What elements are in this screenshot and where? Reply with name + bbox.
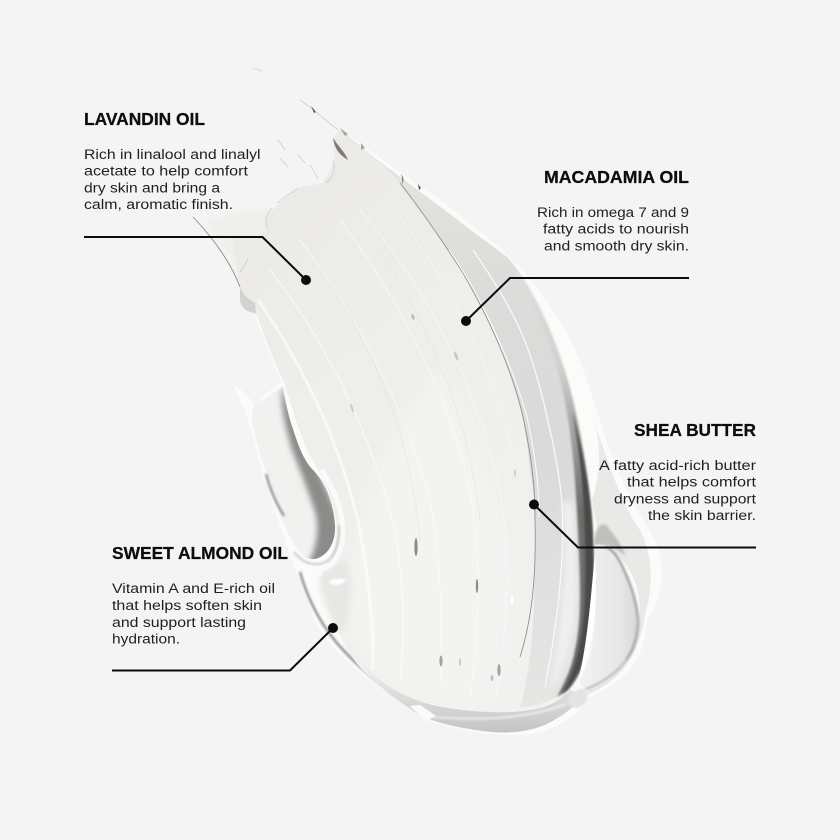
text: lavandin oil description: acetate to help comfort — [84, 164, 248, 180]
heading: sweet almond oil: SWEET ALMOND OIL — [112, 543, 288, 563]
bubbles — [349, 314, 516, 681]
text: lavandin oil description — [84, 147, 260, 213]
gloss highlight — [328, 579, 346, 585]
text: shea butter description: the skin barrier. — [648, 508, 756, 524]
speck — [401, 174, 403, 184]
pocket dark crescent — [282, 386, 340, 566]
text: sweet almond oil description: and support lasting — [112, 615, 246, 631]
text: macadamia oil description: fatty acids to nourish — [543, 222, 689, 238]
left pocket — [252, 386, 343, 569]
top wisps — [193, 68, 338, 287]
right lobe — [578, 420, 651, 696]
left blob — [240, 287, 256, 313]
text: shea butter description: A fatty acid-rich butter — [599, 458, 756, 474]
fold band — [355, 653, 582, 732]
lower-left shadow edge — [300, 572, 425, 716]
fold highlight — [594, 524, 626, 556]
ridge nick 2 — [361, 143, 365, 150]
fold highlight line — [424, 704, 566, 719]
lobe lower edge — [586, 660, 626, 689]
white slit — [578, 552, 596, 682]
text: macadamia oil description: and smooth dry skin. — [544, 238, 689, 254]
callout: lavandin oil — [84, 109, 311, 285]
text: sweet almond oil description: Vitamin A and E-rich oil — [112, 581, 275, 597]
lobe inner — [580, 546, 637, 688]
lobe dark edge — [606, 547, 638, 660]
bottom right connector — [567, 688, 588, 708]
leader line: macadamia oil — [461, 278, 689, 326]
pale gloss beside dark shadow — [550, 500, 577, 690]
shadow beside band — [507, 257, 594, 697]
text: lavandin oil description: Rich in linalool and linalyl — [84, 147, 260, 163]
text: shea butter description: dryness and support — [614, 492, 756, 508]
lower-left gloss — [318, 560, 350, 636]
text: sweet almond oil description: that helps soften skin — [112, 598, 262, 614]
callout: macadamia oil — [461, 167, 689, 326]
brush streaks — [258, 183, 563, 700]
text: sweet almond oil description: hydration. — [112, 632, 180, 648]
heading: macadamia oil: MACADAMIA OIL — [544, 167, 689, 187]
main cream body — [234, 128, 594, 713]
leader line: sweet almond oil — [112, 623, 338, 670]
heading: lavandin oil: LAVANDIN OIL — [84, 109, 205, 129]
notch — [410, 705, 436, 721]
flap dark edge — [266, 474, 284, 516]
top ridge shadows — [240, 106, 421, 313]
grey band — [372, 155, 587, 708]
pocket rim shadow — [294, 525, 339, 564]
leader line: shea butter — [529, 500, 756, 548]
callout: sweet almond oil — [112, 543, 338, 670]
cream smear — [193, 68, 662, 735]
text: macadamia oil description: Rich in omega 7 and 9 — [537, 205, 689, 221]
text: shea butter description — [599, 458, 756, 524]
text: macadamia oil description — [537, 205, 689, 254]
ridge shadow — [333, 138, 348, 160]
ridge nick — [340, 128, 348, 136]
heading: shea butter: SHEA BUTTER — [634, 420, 756, 440]
text: lavandin oil description: dry skin and bring a — [84, 180, 220, 196]
bottom folds — [355, 653, 588, 732]
speck — [418, 184, 421, 190]
lighter lower body — [350, 370, 510, 708]
text: lavandin oil description: calm, aromatic finish. — [84, 197, 233, 213]
outer white rim of smear — [233, 128, 662, 735]
callout: shea butter — [529, 420, 756, 548]
dark shadow core — [562, 410, 594, 695]
feathered top-left edge — [205, 210, 270, 290]
leader line: lavandin oil — [84, 237, 311, 285]
ridge tip — [311, 106, 316, 113]
text: shea butter description: that helps comfort — [627, 474, 756, 490]
pocket rim — [290, 470, 343, 569]
text: sweet almond oil description — [112, 581, 275, 648]
pocket inner — [252, 386, 335, 559]
lobe pale outer fold — [578, 420, 651, 696]
